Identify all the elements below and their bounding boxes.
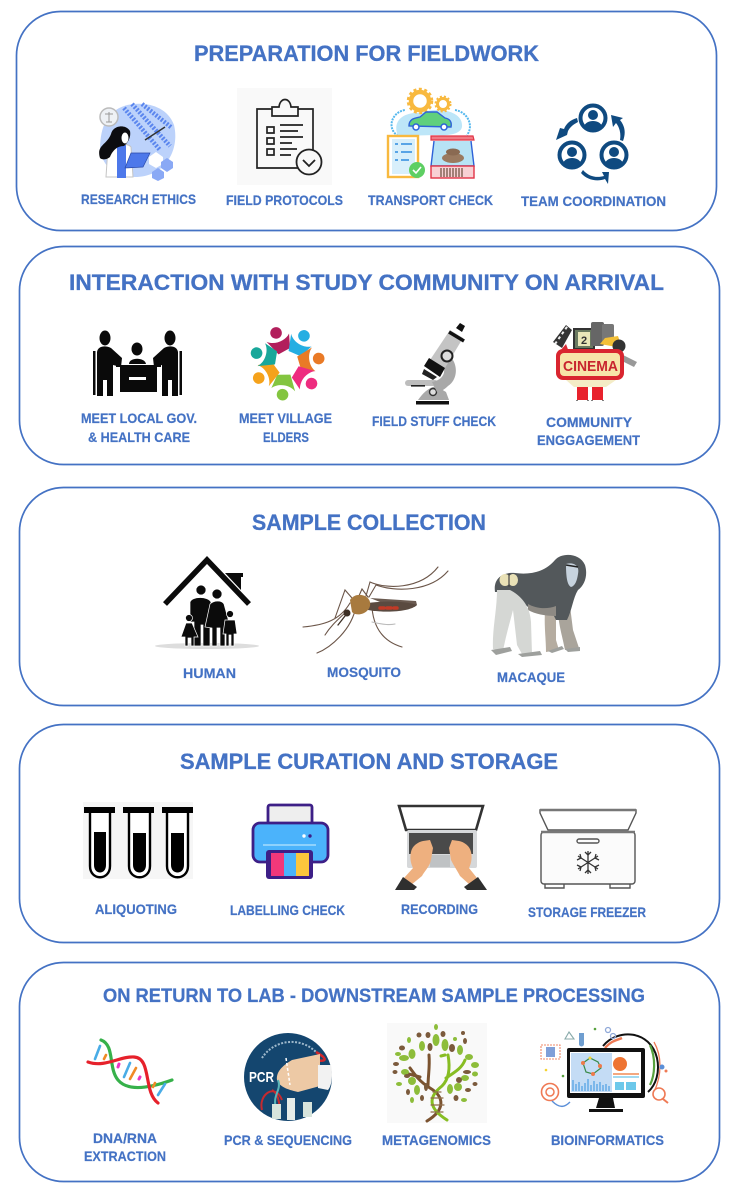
label: transport check: TRANSPORT CHECK	[368, 192, 493, 208]
icon: mosquito	[303, 567, 448, 653]
label: community engagement: COMMUNITY	[546, 414, 633, 430]
icon: three test tubes	[83, 802, 193, 879]
label: metagenomics: METAGENOMICS	[382, 1132, 491, 1148]
icon: metagenomics tree	[387, 1023, 487, 1123]
panel: interaction with study community	[20, 246, 720, 464]
icon: circle of village elders	[247, 323, 326, 402]
label: mosquito: MOSQUITO	[327, 664, 401, 680]
label: aliquoting: ALIQUOTING	[95, 901, 177, 917]
icon: cinema sign: CINEMA	[563, 358, 618, 375]
icon: bioinformatics monitor	[541, 1028, 668, 1112]
icon: hands on laptop	[395, 806, 487, 890]
icon: dna helix	[88, 1040, 172, 1103]
heading: sample collection: SAMPLE COLLECTION	[252, 510, 486, 535]
label: dna/rna extraction	[84, 1130, 166, 1164]
label: research ethics: RESEARCH ETHICS	[81, 191, 196, 207]
label: meet local gov: MEET LOCAL GOV.	[81, 410, 197, 426]
label: community engagement	[537, 414, 640, 448]
label: meet local gov: & HEALTH CARE	[88, 429, 190, 445]
panel: sample curation and storage	[20, 724, 720, 942]
heading: on return to lab: ON RETURN TO LAB - DOWNSTREAM SAMPLE PROCESSING	[103, 986, 645, 1007]
heading: preparation for fieldwork: PREPARATION FOR FIELDWORK	[194, 41, 539, 66]
icon: pcr badge: PCR	[249, 1069, 274, 1086]
label: storage freezer: STORAGE FREEZER	[528, 904, 646, 920]
label: recording: RECORDING	[401, 901, 478, 917]
label: bioinformatics: BIOINFORMATICS	[551, 1132, 664, 1148]
icon: team coordination	[556, 106, 626, 184]
label: labelling check: LABELLING CHECK	[230, 902, 345, 918]
icon: transport check	[388, 89, 474, 178]
label: meet local gov	[81, 410, 197, 445]
label: team coordination: TEAM COORDINATION	[521, 193, 666, 209]
label: dna/rna extraction: DNA/RNA	[93, 1130, 157, 1146]
panel: on return to lab	[20, 962, 720, 1182]
icon: macaque	[491, 555, 586, 657]
label: community engagement: ENGGAGEMENT	[537, 432, 640, 448]
label: meet village elders	[239, 410, 332, 445]
icon: cinema sign: 2	[581, 335, 587, 347]
icon: field protocols	[237, 88, 332, 185]
label: meet village elders: ELDERS	[263, 429, 309, 445]
heading: interaction with study community: INTERACTION WITH STUDY COMMUNITY ON ARRIVAL	[69, 270, 664, 295]
icon: microscope	[405, 323, 465, 404]
label: field stuff check: FIELD STUFF CHECK	[372, 413, 496, 429]
icon: cinema sign	[553, 322, 637, 401]
label: macaque: MACAQUE	[497, 669, 565, 685]
label: human: HUMAN	[183, 665, 236, 681]
panel: preparation for fieldwork	[16, 12, 716, 230]
icon: storage freezer	[540, 810, 636, 888]
icon: family under a house roof	[155, 560, 259, 649]
label: field protocols: FIELD PROTOCOLS	[226, 192, 343, 208]
icon: research ethics	[99, 104, 175, 181]
heading: sample curation and storage: SAMPLE CURATION AND STORAGE	[180, 749, 558, 774]
icon: meeting at a table	[93, 330, 182, 396]
label: dna/rna extraction: EXTRACTION	[84, 1148, 166, 1164]
icon: pcr badge	[244, 1033, 332, 1121]
label: meet village elders: MEET VILLAGE	[239, 410, 332, 426]
panel: sample collection	[20, 488, 720, 706]
icon: printer	[253, 805, 328, 879]
label: pcr and sequencing: PCR & SEQUENCING	[224, 1132, 352, 1148]
